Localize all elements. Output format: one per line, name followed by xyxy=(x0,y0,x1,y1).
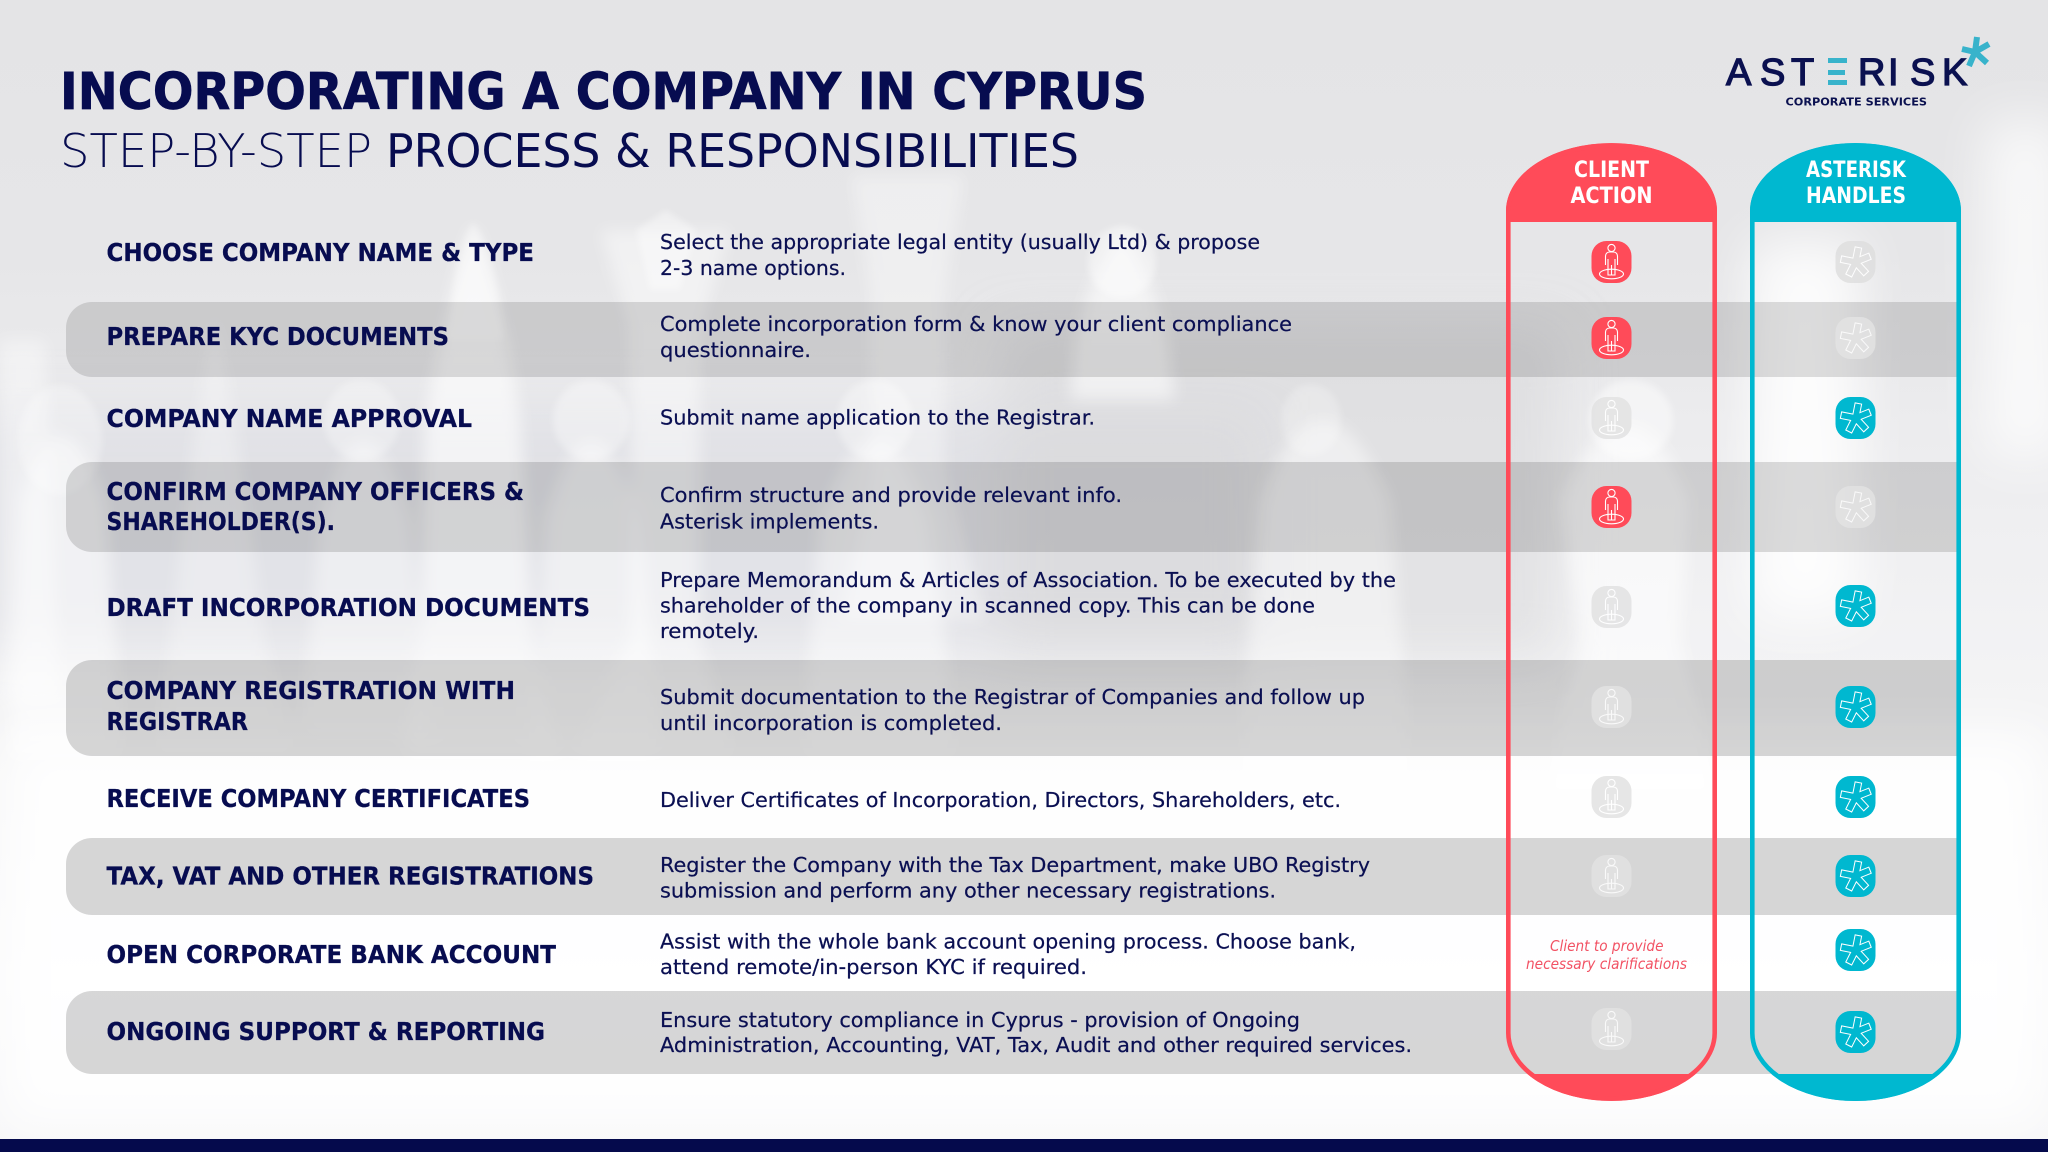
note: client to provide clarifications xyxy=(1526,937,1687,973)
icon: asterisk inactive row 4 xyxy=(1836,486,1876,528)
icon: asterisk active row 8 xyxy=(1836,855,1876,897)
description: questionnaire. xyxy=(660,338,811,362)
description: attend remote/in-person KYC if required. xyxy=(660,955,1087,979)
row: tax, VAT and other registrations xyxy=(66,838,1958,915)
description: Assist with the whole bank account opening process. Choose bank, xyxy=(660,930,1356,954)
description: shareholder of the company in scanned copy. This can be done xyxy=(660,594,1315,618)
title xyxy=(60,63,1147,178)
row: prepare KYC documents xyxy=(66,302,1958,377)
column heading: HANDLES xyxy=(1806,184,1906,209)
description: remotely. xyxy=(660,619,759,643)
description xyxy=(660,1008,1412,1057)
footer bar xyxy=(0,1139,2048,1152)
row: company registration with registrar xyxy=(66,660,1958,756)
row: confirm company officers: SHAREHOLDER(S). xyxy=(106,507,335,536)
row: ongoing support and reporting: ONGOING SUPPORT & REPORTING xyxy=(106,1017,545,1046)
row: choose company name and type xyxy=(106,230,1260,280)
note: client to provide clarifications: necessary clarifications xyxy=(1526,955,1687,973)
row: company registration with registrar: REGISTRAR xyxy=(106,707,248,736)
icon: asterisk active row 9 xyxy=(1836,929,1876,971)
description: submission and perform any other necessary registrations. xyxy=(660,878,1276,902)
description xyxy=(660,930,1356,979)
logo: Asterisk Corporate Services: T xyxy=(1791,52,1814,94)
column heading: ACTION xyxy=(1570,184,1652,209)
logo: Asterisk Corporate Services: R xyxy=(1858,52,1885,94)
description: Prepare Memorandum & Articles of Association. To be executed by the xyxy=(660,568,1396,592)
subheading xyxy=(60,124,1079,178)
icon: client inactive row 7 xyxy=(1592,776,1632,818)
row: confirm company officers: CONFIRM COMPANY OFFICERS & xyxy=(106,477,524,506)
subheading: STEP-BY-STEP xyxy=(60,124,372,178)
icon: asterisk inactive row 1 xyxy=(1836,241,1876,283)
row: company registration with registrar: COMPANY REGISTRATION WITH xyxy=(106,676,515,705)
description xyxy=(660,483,1122,534)
subheading: PROCESS & RESPONSIBILITIES xyxy=(386,124,1079,178)
panel: client action column xyxy=(1500,140,1725,1104)
column heading xyxy=(1570,158,1652,209)
icon: client inactive row 5 xyxy=(1592,586,1632,628)
description: Select the appropriate legal entity (usually Ltd) & propose xyxy=(660,230,1260,254)
logo: Asterisk Corporate Services: CORPORATE SERVICES xyxy=(1786,96,1927,108)
icon: client active row 2 xyxy=(1592,317,1632,359)
logo: Asterisk Corporate Services xyxy=(1726,37,1989,108)
icon: asterisk active row 6 xyxy=(1836,686,1876,728)
description: Submit name application to the Registrar. xyxy=(660,406,1095,430)
row: open corporate bank account: OPEN CORPORATE BANK ACCOUNT xyxy=(106,940,556,969)
row: draft incorporation documents: DRAFT INCORPORATION DOCUMENTS xyxy=(106,593,590,622)
column heading xyxy=(1806,158,1907,209)
description xyxy=(660,312,1292,362)
row: draft incorporation documents xyxy=(106,568,1396,643)
icon: client inactive row 8 xyxy=(1592,855,1632,897)
icon: asterisk active row 7 xyxy=(1836,776,1876,818)
icon: client inactive row 3 xyxy=(1592,397,1632,439)
description: Asterisk implements. xyxy=(660,510,879,534)
description: Administration, Accounting, VAT, Tax, Audit and other required services. xyxy=(660,1033,1412,1057)
description: Ensure statutory compliance in Cyprus - provision of Ongoing xyxy=(660,1008,1300,1032)
description: until incorporation is completed. xyxy=(660,711,1002,735)
icon: client active row 4 xyxy=(1592,486,1632,528)
logo: Asterisk Corporate Services: S xyxy=(1760,52,1785,94)
logo: Asterisk Corporate Services: I xyxy=(1888,52,1899,94)
row: tax, VAT and other registrations: TAX, VAT AND OTHER REGISTRATIONS xyxy=(106,862,594,890)
description: Complete incorporation form & know your client compliance xyxy=(660,312,1292,336)
column heading: CLIENT xyxy=(1574,158,1649,183)
icon: asterisk inactive row 2 xyxy=(1836,317,1876,359)
icon: asterisk active row 3 xyxy=(1836,397,1876,439)
description xyxy=(660,230,1260,280)
description: Submit documentation to the Registrar of Companies and follow up xyxy=(660,685,1365,709)
column heading: ASTERISK xyxy=(1806,158,1907,183)
icon: client inactive row 10 xyxy=(1592,1008,1632,1050)
note: client to provide clarifications: Client to provide xyxy=(1550,937,1664,955)
description: Confirm structure and provide relevant info. xyxy=(660,483,1122,507)
icon: asterisk active row 5 xyxy=(1836,585,1876,627)
description: Register the Company with the Tax Department, make UBO Registry xyxy=(660,853,1370,877)
row: ongoing support and reporting xyxy=(66,991,1959,1074)
logo: Asterisk Corporate Services: A xyxy=(1726,52,1752,94)
icon: asterisk active row 10 xyxy=(1836,1011,1876,1053)
panel: asterisk handles column xyxy=(1745,140,1970,1104)
description xyxy=(660,568,1396,643)
main heading: INCORPORATING A COMPANY IN CYPRUS xyxy=(60,63,1147,122)
row: confirm company officers xyxy=(66,462,1958,552)
description: 2-3 name options. xyxy=(660,256,846,280)
description xyxy=(660,853,1370,902)
row: company name approval xyxy=(106,404,1095,433)
row: choose company name and type: CHOOSE COMPANY NAME & TYPE xyxy=(106,238,534,267)
logo: Asterisk Corporate Services: K xyxy=(1942,52,1967,94)
description: Deliver Certificates of Incorporation, Directors, Shareholders, etc. xyxy=(660,788,1341,812)
logo: Asterisk Corporate Services: S xyxy=(1910,52,1935,94)
icon: client inactive row 6 xyxy=(1592,686,1632,728)
row: receive company certificates xyxy=(106,784,1341,813)
description xyxy=(660,685,1365,735)
icon: client active row 1 xyxy=(1592,241,1632,283)
row: open corporate bank account xyxy=(106,930,1356,979)
row: receive company certificates: RECEIVE COMPANY CERTIFICATES xyxy=(106,784,530,813)
row: company name approval: COMPANY NAME APPROVAL xyxy=(106,404,472,433)
row: prepare KYC documents: PREPARE KYC DOCUMENTS xyxy=(106,322,449,351)
